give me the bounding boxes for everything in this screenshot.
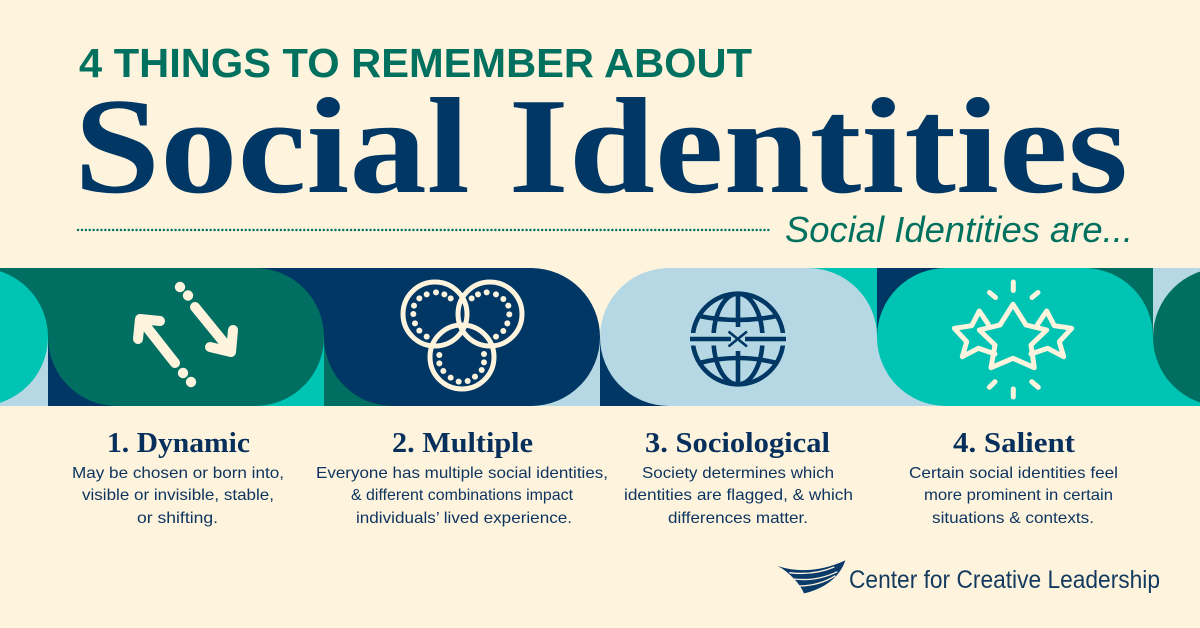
main title: Social Identities <box>74 70 1128 222</box>
column 1: dynamic: or shifting. <box>137 510 218 527</box>
dotted divider <box>78 229 772 231</box>
column 2: multiple: individuals’ lived experience. <box>356 510 572 527</box>
column 3: sociological: identities are flagged, & which <box>624 487 853 504</box>
subtitle: Social Identities are... <box>785 209 1133 250</box>
column 2: multiple <box>316 428 608 527</box>
kicker heading: 4 THINGS TO REMEMBER ABOUT <box>79 40 752 86</box>
panel: multiple pill <box>324 268 600 406</box>
panel: dynamic pill <box>48 268 324 406</box>
logo wordmark: Center for Creative Leadership <box>849 566 1160 594</box>
column 1: dynamic: 1. Dynamic <box>107 428 250 459</box>
column 4: salient: more prominent in certain <box>924 487 1113 504</box>
column 1: dynamic: May be chosen or born into, <box>72 465 284 482</box>
panel: salient pill <box>877 268 1153 406</box>
icon: three stars <box>954 282 1072 397</box>
column 3: sociological <box>624 428 853 527</box>
icon: logo wing <box>777 560 845 593</box>
column 4: salient: Certain social identities feel <box>909 465 1118 482</box>
illustrated band <box>0 268 1200 406</box>
panel: sociological pill <box>600 268 877 406</box>
column 2: multiple: Everyone has multiple social identities, <box>316 465 608 482</box>
column 3: sociological: Society determines which <box>642 465 834 482</box>
column 4: salient <box>909 428 1118 527</box>
column 1: dynamic <box>72 428 284 527</box>
column 2: multiple: 2. Multiple <box>392 428 533 459</box>
column 3: sociological: 3. Sociological <box>645 428 830 459</box>
icon: globe <box>685 294 791 384</box>
column 4: salient: 4. Salient <box>953 428 1076 459</box>
column 3: sociological: differences matter. <box>668 510 808 527</box>
logo: Center for Creative Leadership <box>777 560 1160 594</box>
column 1: dynamic: visible or invisible, stable, <box>82 487 274 504</box>
column 2: multiple: & different combinations impact <box>351 487 574 504</box>
column 4: salient: situations & contexts. <box>932 510 1094 527</box>
icon: opposing arrows <box>138 282 233 387</box>
icon: three overlapping circles <box>403 282 522 389</box>
